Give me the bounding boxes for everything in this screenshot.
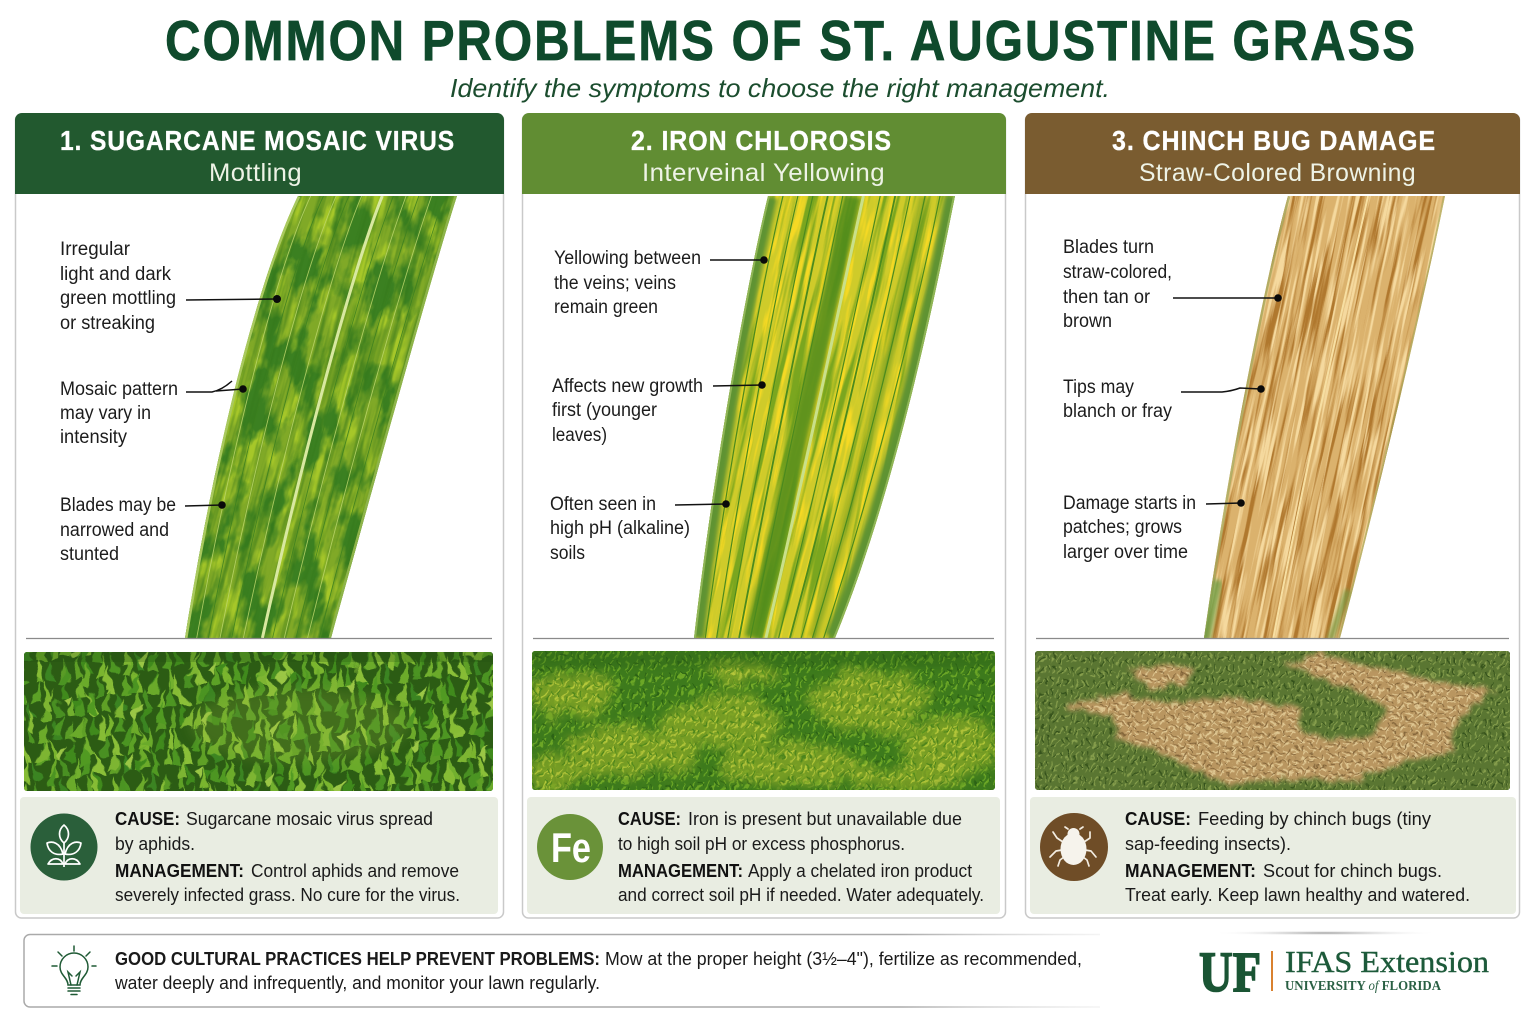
callout: tips blanch: blanch or fray — [1063, 401, 1172, 422]
callout: damage patches: Damage starts in — [1063, 493, 1196, 514]
callout: yellowing between veins: remain green — [554, 297, 658, 318]
cause and management text: Treat early. Keep lawn healthy and watered. — [1125, 884, 1470, 905]
panel 2 header — [522, 113, 1006, 194]
panel 3 header: Straw-Colored Browning — [1139, 159, 1416, 187]
callout: high pH soils: soils — [550, 543, 585, 564]
icon: plant — [30, 814, 98, 880]
info box: chinch bug cause and management — [1030, 797, 1516, 914]
cause and management text: Control aphids and remove — [251, 860, 459, 881]
cause and management text: Sugarcane mosaic virus spread — [186, 808, 433, 829]
callout: mosaic pattern — [60, 379, 247, 448]
panel 2 header: 2. IRON CHLOROSIS — [631, 125, 892, 156]
blade illustration: interveinal yellowing — [694, 196, 955, 638]
logo: UF IFAS Extension: IFAS Extension — [1285, 944, 1490, 979]
callout: new growth — [552, 376, 766, 446]
callout: damage patches — [1063, 493, 1245, 563]
icon: Fe — [537, 814, 603, 880]
panel: chinch bug damage — [1025, 113, 1536, 918]
blade illustration: mottled — [185, 196, 457, 638]
cause and management text: MANAGEMENT: — [115, 860, 244, 881]
callout: narrowed blades: stunted — [60, 544, 119, 565]
footer text — [114, 949, 1082, 993]
icon: bug — [1040, 813, 1108, 881]
cause and management text: MANAGEMENT: — [618, 860, 743, 881]
callout: narrowed blades: narrowed and — [60, 520, 169, 541]
cause and management text: CAUSE: — [618, 808, 681, 829]
callout: mosaic pattern: may vary in — [60, 403, 151, 424]
callout: mottling — [60, 239, 281, 334]
callout: narrowed blades — [60, 495, 226, 565]
photo: mottled lawn — [24, 652, 493, 791]
cause and management text: to high soil pH or excess phosphorus. — [618, 833, 905, 854]
callout: tips blanch — [1063, 377, 1265, 422]
callout: damage patches: larger over time — [1063, 542, 1188, 563]
cause and management text: by aphids. — [115, 833, 195, 854]
info box: iron cause and management — [527, 797, 1000, 914]
callout: high pH soils: Often seen in — [550, 494, 656, 515]
cause and management text: Apply a chelated iron product — [748, 860, 972, 881]
callout: straw colored: straw-colored, — [1063, 262, 1172, 283]
cause and management text: MANAGEMENT: — [1125, 860, 1256, 881]
photo: yellowing lawn — [532, 651, 995, 790]
logo: UF IFAS Extension: UNIVERSITY of FLORIDA — [1285, 978, 1441, 993]
callout: straw colored: Blades turn — [1063, 237, 1154, 258]
panel 1 header: Mottling — [209, 159, 302, 187]
panel: iron chlorosis — [522, 113, 1006, 919]
callout: mottling: or streaking — [60, 313, 155, 334]
info box: virus cause and management — [20, 797, 498, 914]
cause and management text — [1125, 808, 1470, 905]
callout: yellowing between veins: the veins; veins — [554, 273, 676, 294]
callout: new growth: first (younger — [552, 400, 658, 421]
cause and management text: Iron is present but unavailable due — [688, 808, 962, 829]
panel 1 header — [15, 113, 504, 194]
callout: new growth: leaves) — [552, 425, 607, 446]
callout: yellowing between veins: Yellowing between — [554, 248, 701, 269]
cause and management text: severely infected grass. No cure for the virus. — [115, 884, 460, 905]
callout: new growth: Affects new growth — [552, 376, 703, 397]
callout: straw colored: brown — [1063, 311, 1112, 332]
panel 3 header — [1025, 113, 1520, 194]
icon: Fe: Fe — [551, 824, 591, 871]
cause and management text: sap-feeding insects). — [1125, 833, 1291, 854]
footer: good cultural practices — [24, 934, 1100, 1007]
callout: tips blanch: Tips may — [1063, 377, 1134, 398]
cause and management text: and correct soil pH if needed. Water adequately. — [618, 884, 984, 905]
callout: straw colored — [1063, 237, 1282, 332]
logo: UF IFAS Extension — [1199, 941, 1490, 1004]
callout: straw colored: then tan or — [1063, 287, 1151, 308]
cause and management text — [115, 808, 460, 905]
callout: damage patches: patches; grows — [1063, 517, 1182, 538]
panel 1 header: 1. SUGARCANE MOSAIC VIRUS — [60, 125, 455, 156]
footer text: Mow at the proper height (3½–4"), fertilize as recommended, — [605, 949, 1082, 969]
callout: mottling: green mottling — [60, 288, 176, 309]
cause and management text — [618, 808, 984, 905]
panel 3 header: 3. CHINCH BUG DAMAGE — [1112, 125, 1436, 156]
callout: yellowing between veins — [554, 248, 768, 318]
callout: high pH soils — [550, 494, 730, 564]
photo: brown patches in lawn — [1035, 651, 1510, 790]
blade illustration: straw browning — [1204, 196, 1445, 638]
footer text: water deeply and infrequently, and monitor your lawn regularly. — [114, 973, 600, 993]
subtitle: Identify the symptoms to choose the right management. — [450, 73, 1110, 103]
callout: narrowed blades: Blades may be — [60, 495, 176, 516]
callout: mosaic pattern: intensity — [60, 427, 127, 448]
cause and management text: CAUSE: — [1125, 808, 1191, 829]
callout: mosaic pattern: Mosaic pattern — [60, 379, 178, 400]
cause and management text: Feeding by chinch bugs (tiny — [1198, 808, 1432, 829]
cause and management text: CAUSE: — [115, 808, 180, 829]
callout: mottling: Irregular — [60, 239, 131, 260]
callout: high pH soils: high pH (alkaline) — [550, 518, 690, 539]
logo: UF IFAS Extension: UF — [1199, 941, 1261, 1004]
cause and management text: Scout for chinch bugs. — [1263, 860, 1442, 881]
footer text: GOOD CULTURAL PRACTICES HELP PREVENT PROBLEMS: — [115, 949, 600, 969]
panel: sugarcane mosaic virus — [14, 113, 504, 919]
panel 2 header: Interveinal Yellowing — [642, 159, 885, 187]
icon: light bulb — [52, 946, 96, 994]
callout: mottling: light and dark — [60, 264, 171, 285]
